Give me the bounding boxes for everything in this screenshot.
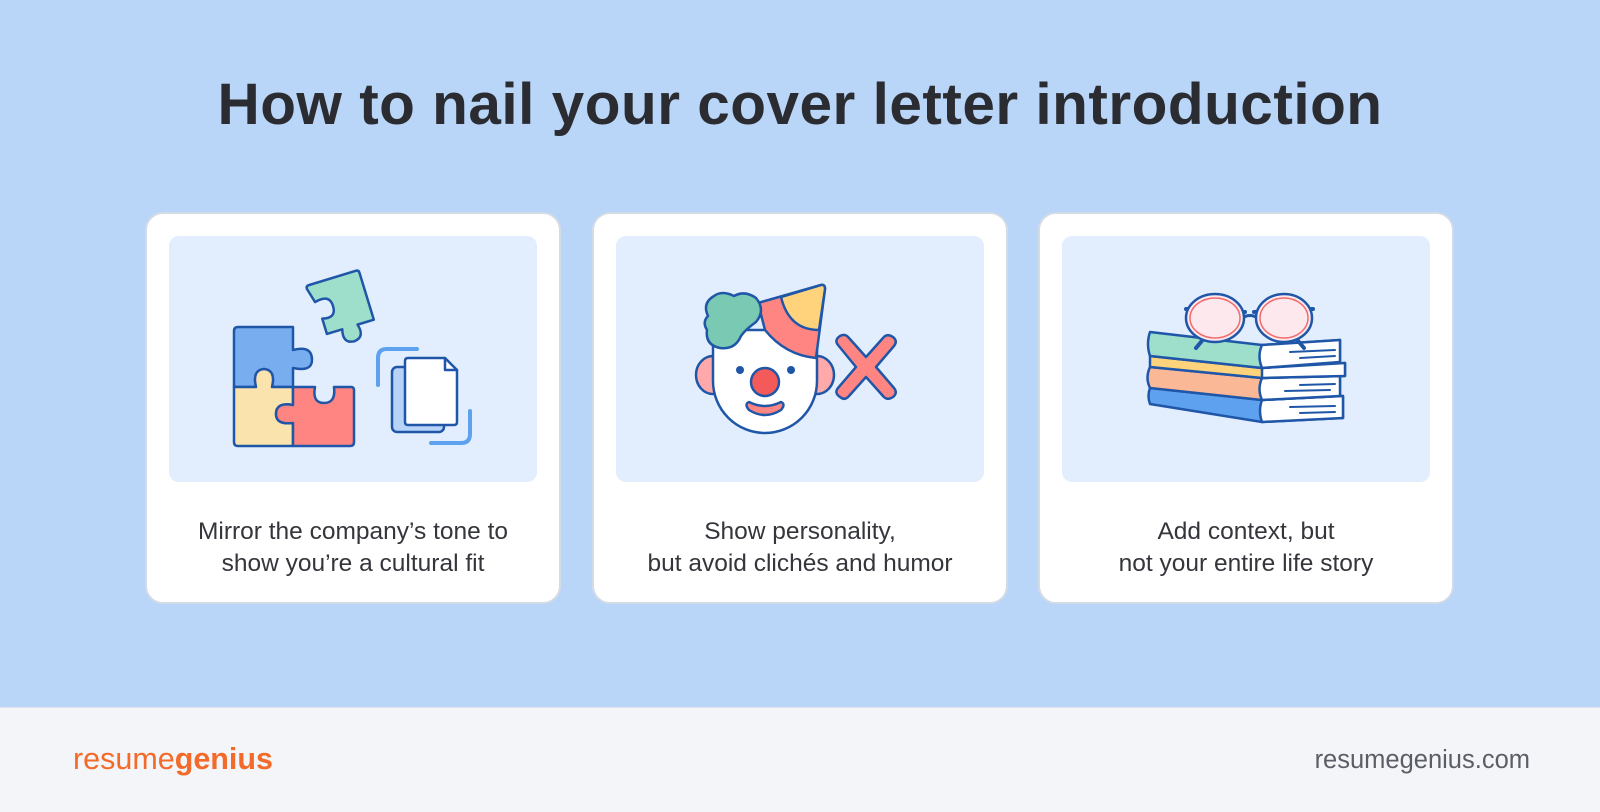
text: personality [647,518,953,577]
text: context: not your entire life story [1119,550,1373,577]
icon: clown with cross [696,285,896,433]
text: personality: but avoid clichés and humor [647,550,953,577]
footer [0,707,1600,812]
title: How to nail your cover letter introduction [217,72,1383,137]
text: mirror tone: show you’re a cultural fit [222,550,484,577]
icon: puzzle and documents [234,270,470,446]
url: resumegenius.com [1315,746,1530,774]
illustration panel: puzzle [169,236,537,482]
text: personality: Show personality, [704,518,896,545]
text: mirror tone [198,518,508,577]
text: context: Add context, but [1157,518,1335,545]
panel: mirror tone [145,212,561,604]
illustration panel: clown [616,236,984,482]
text: context [1119,518,1374,577]
logo: resumegenius [73,742,273,776]
text: mirror tone: Mirror the company’s tone to [198,518,508,545]
panel: personality [592,212,1008,604]
illustration panel: books [1062,236,1430,482]
panel: context [1038,212,1454,604]
icon: books with glasses [1148,294,1345,422]
